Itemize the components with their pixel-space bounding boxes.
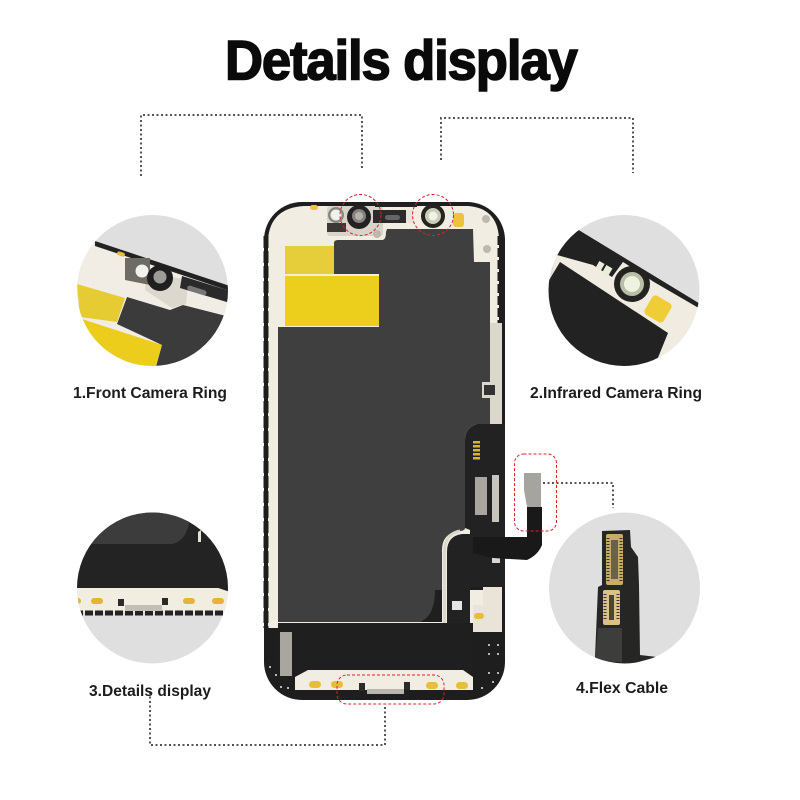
title: Details display	[225, 29, 578, 92]
yellow tape lower	[82, 319, 162, 368]
bottom corner dots	[269, 644, 499, 689]
front camera lens	[347, 205, 371, 229]
leader line: front camera	[141, 115, 362, 176]
infrared camera lens	[624, 276, 640, 292]
left edge notches	[264, 236, 268, 628]
front camera lens	[147, 265, 173, 291]
phone screen assembly	[264, 202, 542, 700]
red dashed callout: bottom sensors	[337, 675, 444, 704]
dark corner of panel	[420, 590, 442, 622]
right side metal bracket	[482, 323, 502, 424]
top yellow pads	[310, 205, 464, 227]
right edge notches	[498, 236, 502, 324]
lower black battery strip	[278, 623, 473, 673]
cream metal frame	[268, 206, 502, 632]
black lower edge	[75, 610, 230, 616]
white flex gap piece	[492, 557, 500, 563]
leader line: details display	[150, 692, 385, 745]
top right screws	[482, 215, 491, 253]
yellow tape upper	[77, 284, 125, 322]
upper connector	[606, 534, 623, 585]
flex board	[465, 424, 505, 587]
black panel	[545, 262, 668, 370]
yellow tape lower	[285, 276, 379, 326]
external flex cable	[473, 507, 542, 560]
lower cream strip	[295, 670, 473, 690]
label 2: 2.Infrared Camera Ring	[530, 385, 702, 402]
lower right yellow pad	[474, 613, 484, 619]
infrared camera outer ring	[614, 266, 650, 302]
leader line: infrared camera	[441, 118, 633, 173]
top black band	[557, 230, 698, 308]
yellow small pad	[117, 251, 125, 257]
cream curved strip beside flex	[444, 531, 460, 624]
infrared camera middle ring	[620, 272, 644, 296]
top earpiece area	[327, 204, 417, 238]
side bracket hole	[484, 385, 495, 395]
label 1: 1.Front Camera Ring	[73, 385, 227, 402]
dark panel	[91, 512, 189, 544]
cream sliver	[198, 530, 201, 542]
bottom yellow ovals	[309, 681, 468, 689]
sensor white windows	[595, 261, 612, 276]
qr code	[452, 601, 462, 610]
dot projector bracket	[125, 258, 150, 285]
yellow pad	[644, 295, 672, 323]
lower connector	[603, 590, 620, 625]
flex white connector strip	[492, 475, 499, 522]
infographic canvas	[74, 38, 701, 746]
red dashed callout: flex cable	[514, 454, 556, 531]
label 3: 3.Details display	[89, 683, 211, 700]
sensor bracket	[145, 277, 187, 308]
dot projector lens	[136, 264, 148, 278]
phone black outer frame	[264, 202, 505, 700]
cream frame	[70, 243, 230, 370]
red dashed callout: infrared camera	[412, 194, 454, 236]
black sensor bar	[180, 276, 230, 303]
dark panel	[117, 297, 224, 366]
yellow ovals	[75, 598, 224, 604]
lower flex lighter area	[595, 628, 622, 662]
cream frame	[553, 255, 698, 358]
infrared camera lens	[421, 204, 445, 228]
sensors	[118, 598, 168, 611]
black flex ribbon region	[447, 534, 470, 624]
bottom edge notches	[295, 690, 473, 696]
leader line: flex cable	[543, 483, 613, 508]
detail circle 1: front camera ring	[70, 213, 230, 370]
label 4: 4.Flex Cable	[576, 680, 668, 697]
dark panel	[278, 229, 490, 622]
lower right cream bracket	[473, 587, 502, 632]
bottom sensors	[359, 682, 410, 694]
black strip	[75, 511, 230, 592]
detail circle 3: bottom details	[75, 511, 230, 666]
lens glass	[154, 270, 166, 284]
red dashed callout: front camera	[340, 194, 381, 236]
black flex board	[595, 530, 657, 666]
earpiece pill	[187, 286, 206, 296]
flex metal label	[475, 477, 487, 515]
detail circle 2: infrared camera ring	[545, 213, 702, 370]
flex contact pads	[473, 441, 480, 460]
top black edge	[95, 241, 230, 291]
flex cable metal tip	[524, 473, 541, 507]
detail circle 4: flex connector	[547, 511, 702, 666]
cream strip	[75, 588, 230, 612]
lower left metal label	[280, 632, 292, 676]
yellow tape upper	[285, 246, 334, 274]
